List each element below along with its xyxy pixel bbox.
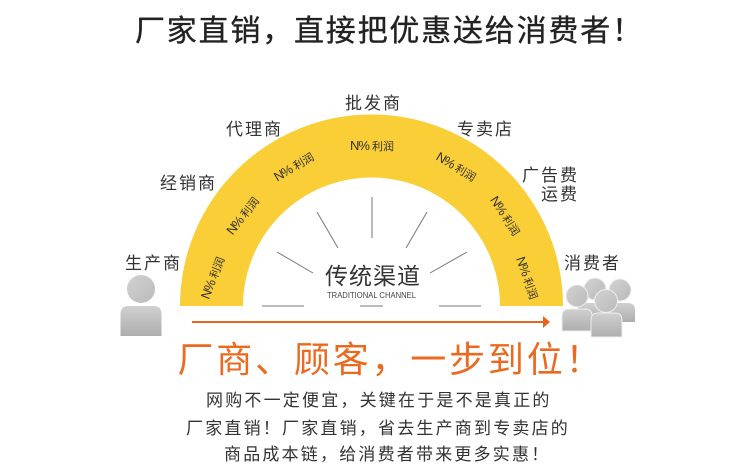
- center label: traditional channel: 传统渠道: [325, 263, 421, 289]
- channel stage labels: 消费者: [564, 254, 621, 273]
- radiating lines: [262, 197, 481, 306]
- channel stage labels: 生产商: [125, 254, 182, 273]
- channel stage labels: 专卖店: [457, 120, 514, 139]
- arch profit labels: N% 利润: [198, 255, 227, 301]
- arch profit labels: N% 利润: [434, 149, 479, 184]
- semicircular arch: traditional channel: [180, 114, 563, 306]
- channel stage labels: 广告费: [522, 166, 579, 185]
- arch profit labels: N% 利润: [487, 193, 524, 238]
- arch profit labels: N% 利润: [513, 255, 542, 301]
- icon: producer: [120, 275, 162, 336]
- body text: [186, 391, 570, 464]
- body text: 商品成本链，给消费者带来更多实惠！: [224, 445, 550, 464]
- arch profit labels: N% 利润: [271, 149, 316, 184]
- channel stage labels: 经销商: [160, 174, 217, 193]
- body text: 厂家直销！厂家直销，省去生产商到专卖店的: [186, 419, 570, 438]
- channel stage labels: 代理商: [226, 120, 283, 139]
- arch profit labels: N% 利润: [223, 194, 262, 238]
- channel stage labels: 批发商: [345, 94, 402, 113]
- arch profit labels: [198, 138, 542, 301]
- orange headline: 厂商、顾客，一步到位！: [178, 339, 604, 380]
- arch profit labels: N% 利润: [350, 138, 394, 153]
- channel stage labels: 运费: [541, 185, 579, 204]
- channel stage labels: [125, 94, 621, 273]
- body text: 网购不一定便宜，关键在于是不是真正的: [206, 391, 552, 410]
- arrow: [192, 316, 550, 328]
- icon: consumers: [562, 278, 635, 337]
- center label: traditional channel: TRADITIONAL CHANNEL: [327, 290, 416, 300]
- title: 厂家直销，直接把优惠送给消费者！: [135, 15, 644, 48]
